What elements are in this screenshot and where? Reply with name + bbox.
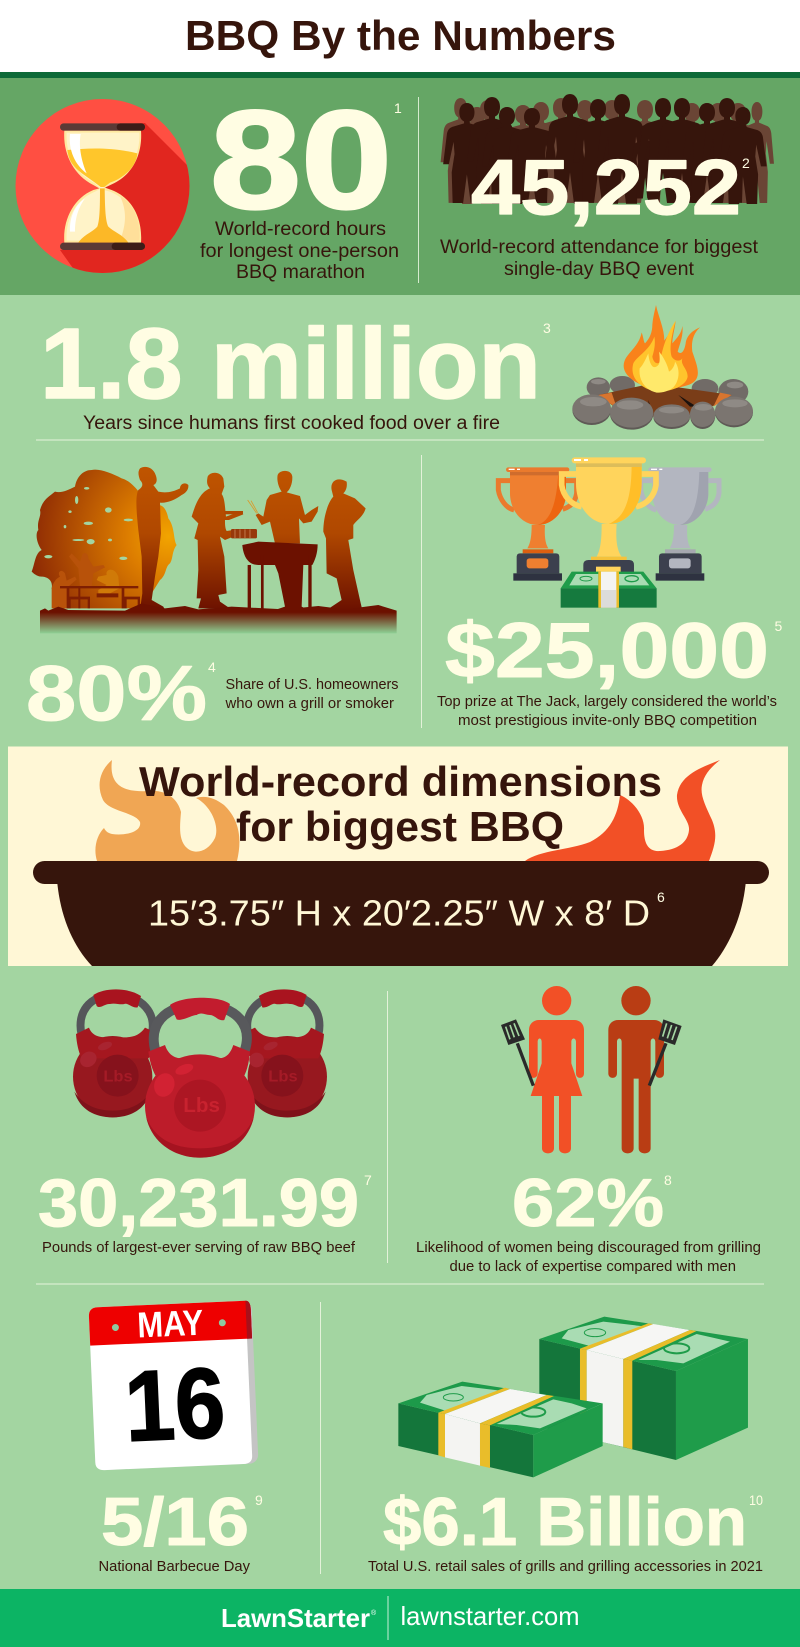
heading xyxy=(139,758,662,850)
icon: campfire xyxy=(572,305,753,430)
icon: trophies with cash xyxy=(498,457,719,608)
stat: national barbecue day: 9 xyxy=(255,1492,263,1508)
icon: kettlebells xyxy=(73,989,327,1158)
stat: 80 percent: Share of U.S. homeowners xyxy=(226,676,398,693)
panel: world records xyxy=(0,78,800,295)
icon: woman and man with spatulas xyxy=(501,986,682,1153)
small stack xyxy=(398,1382,603,1477)
flame left xyxy=(95,760,239,861)
icon: kettlebells: Lbs xyxy=(103,1069,133,1086)
icon: crowd silhouette xyxy=(441,94,774,204)
stat: 80 percent: who own a grill or smoker xyxy=(225,695,394,712)
stat: $25,000 prize: $25,000 xyxy=(445,606,769,694)
man xyxy=(608,986,664,1153)
stat: national barbecue day: 5/16 xyxy=(101,1484,249,1560)
stat: 80 percent: 80% xyxy=(26,649,207,737)
icon: calendar: MAY xyxy=(136,1302,204,1345)
woman xyxy=(529,986,584,1153)
panel: world-record dimensions xyxy=(8,746,788,966)
stat: 62 percent: 8 xyxy=(664,1172,672,1188)
stat: 62 percent xyxy=(416,1165,761,1275)
stat: 62 percent: 62% xyxy=(512,1165,664,1241)
stat: 80 hours: 80 xyxy=(210,81,392,238)
header xyxy=(0,0,800,78)
stat: 30,231.99 pounds: 7 xyxy=(364,1172,372,1188)
website: lawnstarter.com xyxy=(400,1601,580,1631)
stat: 45,252 attendance: single-day BBQ event xyxy=(504,258,695,280)
stat: 80 hours xyxy=(200,81,402,283)
icon: hourglass xyxy=(16,99,190,273)
heading: for biggest BBQ xyxy=(236,803,564,850)
footer xyxy=(0,1589,800,1647)
stat: 80 hours: BBQ marathon xyxy=(236,261,365,283)
stat: 80 hours: World-record hours xyxy=(215,218,386,240)
stat: $25,000 prize: 5 xyxy=(774,618,782,634)
stat: national barbecue day: National Barbecue Day xyxy=(98,1558,250,1575)
stat: 80 hours: 1 xyxy=(394,100,402,116)
icon: calendar xyxy=(89,1300,258,1470)
dimensions text: 6 xyxy=(657,889,665,905)
logo: LawnStarter xyxy=(221,1603,370,1633)
stat: $25,000 prize: Top prize at The Jack, largely considered the world’s xyxy=(437,693,777,710)
stat: 80 percent: 4 xyxy=(208,659,216,675)
icon: kettlebells: Lbs xyxy=(268,1069,298,1086)
icon: kettlebells: Lbs xyxy=(183,1095,220,1117)
illustration: backyard barbecue scene xyxy=(32,467,397,633)
footer: ® xyxy=(371,1609,377,1617)
large stack xyxy=(539,1317,748,1460)
icon: calendar: 16 xyxy=(122,1347,227,1463)
stat: 45,252 attendance: 45,252 xyxy=(471,143,741,231)
heading: World-record dimensions xyxy=(139,758,662,805)
stat: 45,252 attendance xyxy=(440,143,759,280)
stat: 30,231.99 pounds: Pounds of largest-ever serving of raw BBQ beef xyxy=(42,1239,356,1256)
stat: $6.1 billion: $6.1 Billion xyxy=(383,1484,747,1560)
stat: 62 percent: Likelihood of women being discouraged from grilling xyxy=(416,1239,761,1256)
stat: $6.1 billion: 10 xyxy=(749,1492,763,1508)
spatula left xyxy=(501,1019,533,1086)
stat: 1.8 million: Years since humans first cooked food over a fire xyxy=(83,413,500,434)
stat: 80 hours: for longest one-person xyxy=(200,240,399,262)
spatula right xyxy=(649,1019,682,1086)
stat: 45,252 attendance: World-record attendance for biggest xyxy=(440,236,759,258)
stat: 62 percent: due to lack of expertise compared with men xyxy=(450,1258,736,1275)
icon: stacks of cash xyxy=(398,1317,748,1477)
stat: $25,000 prize xyxy=(437,606,782,729)
dimensions text: 15′3.75″ H x 20′2.25″ W x 8′ D xyxy=(148,892,650,934)
stat: 1.8 million: 1.8 million xyxy=(40,308,541,420)
stat: 1.8 million: 3 xyxy=(543,320,551,336)
icon: fire bowl xyxy=(33,861,769,966)
stat: $25,000 prize: most prestigious invite-only BBQ competition xyxy=(458,712,757,729)
stat: $6.1 billion: Total U.S. retail sales of grills and grilling accessories in 2021 xyxy=(368,1558,763,1575)
stat: 45,252 attendance: 2 xyxy=(742,155,750,171)
flame right xyxy=(525,760,720,861)
title: BBQ By the Numbers xyxy=(185,12,616,59)
stat: 80 percent xyxy=(26,649,398,737)
stat: national barbecue day xyxy=(98,1484,263,1575)
stat: 30,231.99 pounds: 30,231.99 xyxy=(38,1165,359,1241)
